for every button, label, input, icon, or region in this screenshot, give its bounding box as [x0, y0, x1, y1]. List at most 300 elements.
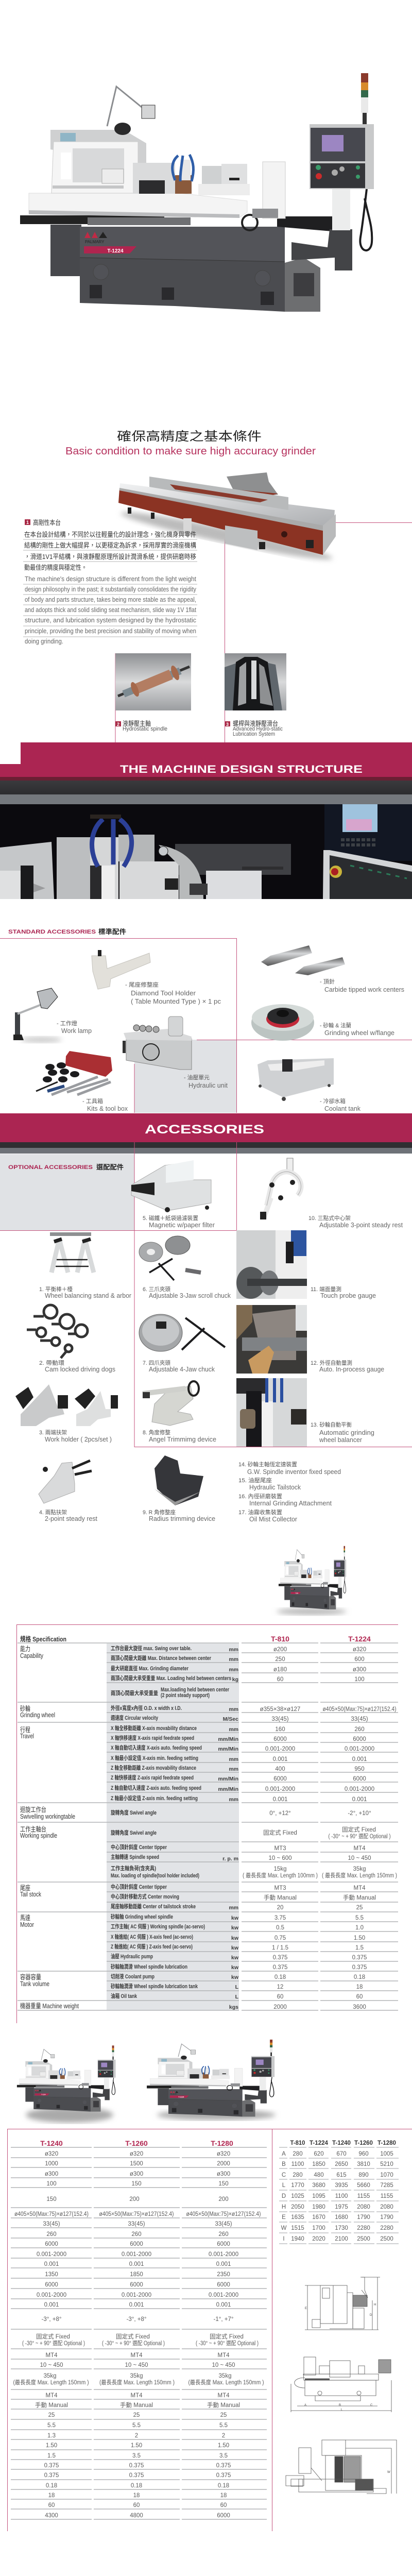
dimension T-1240: 615: [336, 2172, 347, 2178]
table 2 values T-1280: ø405×50(Max:75)×ø127(152.4): [186, 2211, 261, 2217]
text block: rigid base: [23, 519, 197, 645]
table 2 values T-1260: 固定式 Fixed: [116, 2333, 150, 2340]
spec values T-810: 3.75: [274, 1915, 286, 1921]
spec values T-810: 0.001: [273, 1797, 287, 1803]
table 2 values T-1280: ( -30° ~ + 90° 選配 Optional ): [196, 2340, 259, 2347]
table 2 values T-1260: 0.18: [131, 2483, 142, 2489]
icon: grinding wheel with flange: [251, 1004, 314, 1041]
table 2 values T-1260: 18: [133, 2493, 140, 2499]
table 2 values T-1240: 4300: [45, 2513, 58, 2519]
caption: hydrostatic spindle: 2: [117, 722, 119, 727]
control column arm: [291, 229, 352, 270]
table 2 values T-1240: 35kg: [44, 2373, 56, 2379]
spec row rules: [18, 1643, 398, 2010]
spec item labels: Max.loading held between center: [161, 1687, 230, 1693]
table 2 values T-1260: 1500: [130, 2161, 143, 2167]
icon 9: radius trimming device: [154, 1455, 203, 1505]
motor: [118, 835, 154, 861]
table 2 values T-1240: 150: [46, 2196, 57, 2202]
dimension T-1280: [380, 2151, 393, 2242]
label 10: [308, 1215, 403, 1229]
table 2 values T-1280: 固定式 Fixed: [210, 2333, 244, 2340]
table 2 values T-1260: 0.001: [129, 2261, 144, 2267]
table 2 values T-1240: 手動 Manual: [35, 2401, 68, 2409]
spec values T-1224: -2°, +10°: [348, 1810, 371, 1817]
label: work lamp: [57, 1020, 92, 1035]
grinding table top: [29, 188, 247, 217]
spec values T-1224: 6000: [353, 1736, 366, 1742]
spec values T-810: ø200: [273, 1647, 287, 1653]
spec group labels: 機器重量 Machine weight: [20, 2002, 79, 2010]
small machine: T-1280: [147, 2040, 276, 2120]
spec group labels: 能力: [20, 1645, 30, 1653]
table 2 values T-1260: 0.375: [129, 2463, 144, 2469]
spec item labels: Max. loading of spindle(tool holder included): [111, 1873, 199, 1879]
spec item labels: 油箱 Oil tank: [111, 1992, 138, 1999]
spec values T-1224: 0.375: [352, 1964, 367, 1971]
curved guard: [159, 845, 203, 899]
table 2 values T-1280: 6000: [217, 2282, 230, 2288]
spec values T-1224: 260: [354, 1726, 365, 1733]
table 2 values T-1260: 0.001-2000: [122, 2292, 151, 2298]
label 10: 10. 三點式中心架: [308, 1215, 351, 1222]
spec group labels: Swivelling workingtable: [20, 1812, 75, 1820]
table 2 values T-1260: (最長長度 Max. Length 150mm ): [99, 2379, 175, 2386]
dimension T-1224: 620: [314, 2151, 324, 2157]
table 2 values T-1240: ( -30° ~ + 90° 選配 Optional ): [22, 2340, 85, 2347]
section title: 確保高精度之基本條件: [117, 430, 262, 444]
caption: lubrication system: 螺桿與液靜壓滑台: [233, 720, 278, 727]
small machine: T-810: [277, 1546, 347, 1615]
text block: rigid base: and adopts thick and solid sliding seat mechanism, slide way 1V 1flat: [25, 606, 196, 614]
table 2 values T-1260: ( -30° ~ + 90° 選配 Optional ): [102, 2340, 165, 2347]
label: kits and tool box: - 工具箱: [82, 1097, 103, 1105]
table 2 values T-1240: 1.3: [47, 2433, 56, 2439]
list: items 14 to 17: Hydraulic Tailstock: [249, 1484, 301, 1491]
label 9: [143, 1509, 215, 1522]
spec group labels: Grinding wheel: [20, 1711, 55, 1719]
drawing: top view: [286, 2440, 397, 2494]
section title: [65, 430, 316, 457]
table 2 values T-1260: 0.001: [129, 2302, 144, 2308]
spec units: mm: [229, 1766, 238, 1772]
spec units: [218, 1647, 239, 2010]
spec values T-810: 160: [275, 1726, 285, 1733]
list: items 14 to 17: 17. 油霧收集裝置: [238, 1509, 282, 1516]
table 2 values T-1260: 6000: [130, 2282, 143, 2288]
dimension T-810: 2050: [291, 2204, 304, 2210]
label 4: 2-point steady rest: [45, 1515, 98, 1522]
blue hoses: [92, 819, 132, 867]
dimension T-1224: 1850: [312, 2161, 325, 2167]
table 2 values T-1260: 6000: [130, 2241, 143, 2247]
label: work lamp: Work lamp: [61, 1027, 92, 1035]
dimension letters: I: [283, 2236, 285, 2242]
label 8: Angel Trimmimg device: [149, 1436, 216, 1443]
spec group labels: 馬達: [20, 1914, 30, 1922]
spec item labels: 中心頂針斜度 Center tipper: [111, 1883, 167, 1890]
table 2 values T-1240: [13, 2151, 89, 2519]
tailstock: [206, 871, 262, 899]
dimension T-1280: 2080: [380, 2204, 393, 2210]
table 2 values T-1280: 0.001-2000: [209, 2251, 238, 2258]
spec units: kw: [231, 1945, 239, 1951]
label: work lamp: - 工作燈: [57, 1020, 77, 1027]
table 2 values T-1280: 10 ~ 450: [212, 2362, 235, 2368]
spec values T-810: 0.001-2000: [265, 1786, 295, 1792]
label: grinding wheel: - 砂輪 & 法蘭: [320, 1022, 351, 1029]
spec table frame: [16, 1625, 398, 2023]
dimension header: [290, 2140, 396, 2146]
wheel head: [133, 163, 175, 194]
spec values T-810: 6000: [273, 1776, 287, 1782]
spec values T-810: 0.375: [273, 1955, 287, 1961]
spec values T-1224: [322, 1647, 397, 2010]
white wheel body: [119, 861, 179, 899]
spec item labels: 工作台最大旋徑 max. Swing over table.: [111, 1645, 192, 1652]
spec units: kw: [231, 1964, 239, 1971]
dimension letters: W: [281, 2225, 287, 2231]
table 2 values T-1240: 0.18: [46, 2483, 57, 2489]
spec values T-1224: 33(45): [351, 1716, 368, 1722]
spec values T-1224: ø300: [353, 1667, 366, 1673]
machine left rear block: [50, 225, 81, 276]
dimension T-1280: 1005: [380, 2151, 393, 2157]
label 2: Cam locked driving dogs: [45, 1366, 115, 1373]
heading: optional accessories: OPTIONAL ACCESSORIES: [8, 1164, 93, 1171]
table 2 frame: [7, 2129, 412, 2531]
label: diamond tool holder: Diamond Tool Holder: [131, 990, 196, 997]
pink frame lines: [0, 939, 412, 1113]
label 8: 8. 角度修整: [143, 1429, 170, 1436]
spec values T-1224: 手動 Manual: [343, 1894, 376, 1901]
dimension T-1240: [335, 2151, 348, 2242]
dimension T-1224: 3680: [312, 2182, 325, 2189]
label 9: 9. R 角修整座: [143, 1509, 176, 1516]
spec units: mm: [229, 1656, 238, 1663]
dimension table: [279, 2140, 399, 2244]
table 2 values T-1260: 5.5: [132, 2422, 141, 2429]
spec values T-810: 0.5: [276, 1925, 284, 1931]
text block: rigid base: ，滑道1V1平結構，與液靜壓原理所設計潤滑系統，提供研磨時移: [24, 553, 196, 561]
spec values T-810: 60: [277, 1676, 283, 1683]
spec values T-810: 33(45): [271, 1716, 289, 1722]
dimension T-1240: 1730: [335, 2225, 348, 2231]
dimension T-1240: 2100: [335, 2236, 348, 2242]
table 2 values T-1260: -3°, +8°: [127, 2316, 146, 2323]
table 2 values T-1260: [99, 2151, 175, 2519]
text block: rigid base: doing grinding.: [25, 638, 63, 645]
table 2 values T-1260: 1850: [130, 2272, 143, 2278]
dimension T-1260: 2080: [357, 2204, 370, 2210]
label 6: Adjustable 3-Jaw scroll chuck: [149, 1292, 231, 1299]
dimension letters: C: [282, 2172, 286, 2178]
spec values T-810: 6000: [273, 1736, 287, 1742]
spec group labels: Tail stock: [20, 1890, 41, 1898]
label: hydraulic unit: - 油壓單元: [184, 1074, 210, 1081]
icon 7: 4-jaw chuck: [139, 1314, 225, 1351]
label 1: [39, 1285, 131, 1299]
label 9: Radius trimming device: [149, 1515, 215, 1522]
label 7: Adjustable 4-Jaw chuck: [149, 1366, 215, 1373]
table 2 values T-1260: 25: [133, 2412, 140, 2418]
spec values T-1224: 0.001-2000: [345, 1746, 374, 1752]
table 2 values T-1280: 1.50: [218, 2443, 229, 2449]
spec values T-1224: 25: [356, 1905, 363, 1911]
label: carbide work centers: - 頂針: [320, 978, 335, 985]
dimension T-1260: 3810: [357, 2161, 370, 2167]
spec values T-810: ø355×38×ø127: [260, 1706, 300, 1713]
table 2 values T-1260: 2: [135, 2433, 138, 2439]
main machine photo: T-1224: [107, 248, 124, 254]
caption: lubrication system: Advanced Hydro-static: [233, 726, 283, 732]
spec item labels: [111, 1645, 231, 1999]
heading: standard accessories: [8, 928, 126, 936]
drawing: front view: C: [370, 2404, 373, 2407]
spec values T-1224: ø405×50(Max:75)×ø127(152.4): [322, 1706, 397, 1713]
wheel head: [90, 837, 118, 899]
table 2 values T-1280: 25: [220, 2412, 227, 2418]
spec units: kg: [232, 1676, 238, 1683]
table 2 values T-1280: 2000: [217, 2161, 230, 2167]
dimension T-1224: 1980: [312, 2204, 325, 2210]
dimension T-1280: 2500: [380, 2236, 393, 2242]
banner: accessories: [0, 1113, 412, 1154]
label 12: 12. 外徑自動量測: [311, 1359, 352, 1366]
dimension T-1240: 1975: [335, 2204, 348, 2210]
table 2 values T-1240: 18: [48, 2493, 55, 2499]
spec item labels: 旋轉角度 Swivel angle: [111, 1829, 157, 1836]
dimension letters: B: [282, 2161, 286, 2167]
dimension header: T-1260: [354, 2140, 373, 2146]
dimension T-1224: 1670: [312, 2214, 325, 2221]
label 11: [311, 1285, 376, 1299]
blue coolant hoses: [173, 155, 193, 181]
table 2 values T-1260: 手動 Manual: [120, 2401, 153, 2409]
grey panel: optional accessories: [0, 1154, 134, 1230]
drawing: top view: W: [387, 2471, 390, 2474]
drawing: front view: [291, 2357, 391, 2412]
label 13: wheel balancer: [319, 1436, 362, 1444]
table 2 values T-1260: 1.50: [131, 2443, 142, 2449]
spec group labels: 工作主軸台: [20, 1825, 46, 1833]
spec values T-1224: 35kg: [353, 1866, 366, 1872]
coolant pump unit: [285, 258, 320, 312]
main machine photo: PALMARY: [85, 240, 105, 244]
table 2 values T-1280: MT4: [217, 2393, 230, 2399]
table 2 values T-1280: ø300: [217, 2171, 230, 2177]
label: diamond tool holder: - 尾座修整座: [125, 981, 159, 988]
heading: optional accessories: 選配配件: [96, 1163, 124, 1171]
section title: Basic condition to make sure high accuracy grinder: [65, 445, 316, 457]
spec units: r. p. m: [222, 1856, 238, 1862]
spec values T-1224: MT4: [353, 1885, 366, 1891]
main machine photo: [20, 73, 374, 312]
drawing: front view: B: [339, 2404, 341, 2407]
label 3: [39, 1429, 112, 1443]
icon: coolant tank: [258, 1058, 334, 1101]
label 10: Adjustable 3-point steady rest: [319, 1222, 403, 1229]
icon: kits and tool box: [36, 1051, 112, 1095]
table 2 values T-1240: ø405×50(Max:75)×ø127(152.4): [14, 2211, 89, 2217]
table 2 values T-1280: 6000: [217, 2513, 230, 2519]
drawing: side view: D: [370, 2314, 372, 2317]
list: items 14 to 17: 16. 內徑研磨裝置: [238, 1493, 282, 1500]
caption: hydrostatic spindle: Hydrostatic spindle: [123, 726, 167, 732]
dimension T-1260: 2280: [357, 2225, 370, 2231]
spec item labels: 兩頂心間最大承受重量: [111, 1689, 158, 1697]
table 2 values T-1280: 5.5: [219, 2422, 228, 2429]
table 2 values T-1260: 3.5: [132, 2453, 141, 2459]
spec item labels: X 軸最小設定值 X-axis min. feeding setting: [111, 1754, 198, 1761]
dimension T-1280: 1790: [380, 2214, 393, 2221]
spec item labels: 中心頂針移動方式 Center moving: [111, 1893, 179, 1900]
spec item labels: 油壓 Hydraulic pump: [111, 1953, 153, 1960]
dimension letters: A: [282, 2151, 286, 2157]
table 2 values T-1280: -1°, +7°: [214, 2316, 233, 2323]
spec values T-1224: 0.18: [354, 1974, 365, 1980]
photo: lubrication system: [225, 653, 286, 710]
dimension T-810: 1770: [291, 2182, 304, 2189]
table 2 values T-1280: 2: [222, 2433, 225, 2439]
control panel casing: [310, 124, 374, 189]
spec units: kgs: [229, 2004, 238, 2010]
spec values T-810: 20: [277, 1905, 283, 1911]
label 6: 6. 三爪夾頭: [143, 1286, 170, 1293]
label 1: Wheel balancing stand & arbor: [45, 1292, 131, 1299]
icon 3: work holders: [15, 1384, 118, 1426]
dimension letters: E: [282, 2214, 286, 2221]
spec units: mm/Min: [218, 1786, 238, 1792]
spec group labels: 行程: [20, 1726, 30, 1734]
table 2 values T-1280: ø320: [217, 2151, 230, 2157]
table 2 values T-1240: 1.5: [47, 2453, 56, 2459]
label: kits and tool box: [82, 1097, 128, 1112]
table 2 values T-1280: 260: [218, 2231, 229, 2238]
label: kits and tool box: Kits & tool box: [87, 1105, 128, 1112]
spec group labels: Capability: [20, 1652, 43, 1659]
label 2: 2. 帶動環: [39, 1359, 64, 1366]
dimension T-1260: 1155: [357, 2193, 370, 2199]
list: items 14 to 17: G.W. Spindle inventor fixed speed: [247, 1468, 341, 1476]
label: carbide work centers: Carbide tipped work centers: [324, 986, 404, 993]
table 2 values T-1260: 260: [131, 2231, 142, 2238]
dimension T-1224: [312, 2151, 325, 2242]
stack light tower: [361, 73, 368, 83]
table 2 values T-1240: 100: [46, 2181, 57, 2187]
label: hydraulic unit: [184, 1074, 228, 1089]
spec values T-810: 60: [277, 1994, 283, 2000]
spec table header: T-1224: [348, 1635, 371, 1643]
spec values T-810: MT3: [274, 1885, 286, 1891]
label 1: 1. 平衡棒＋檯: [39, 1285, 73, 1293]
icon 4: 2-point steady rest: [39, 1461, 92, 1503]
spec item labels: 中心頂針斜度 Center tipper: [111, 1843, 167, 1851]
table 2 values T-1240: 6000: [45, 2282, 58, 2288]
spec item labels: X 軸自動切入速度 X-axis auto. feeding speed: [111, 1744, 202, 1751]
spec units: mm: [229, 1647, 238, 1653]
spec units: mm: [229, 1797, 238, 1803]
table 2 values T-1240: 33(45): [43, 2221, 60, 2227]
table 2 header: T-1280: [211, 2139, 233, 2147]
spec values T-1224: 600: [354, 1656, 365, 1663]
spec item labels: 最大研磨直徑 Max. Grinding diameter: [111, 1665, 189, 1672]
table 2 values T-1240: (最長長度 Max. Length 150mm ): [13, 2379, 89, 2386]
dimension T-1224: 1095: [312, 2193, 325, 2199]
dimension T-1240: 1680: [335, 2214, 348, 2221]
caption: lubrication system: Lubrication System: [233, 731, 275, 737]
dimension letters: [281, 2151, 287, 2242]
icon: hydraulic unit: [123, 1016, 192, 1070]
spec units: mm: [229, 1756, 238, 1762]
spec values T-810: 2000: [273, 2004, 287, 2010]
table 2 values T-1260: 200: [129, 2196, 140, 2202]
drawing: side view: H: [374, 2303, 376, 2307]
label 12: Auto. In-process gauge: [319, 1366, 384, 1373]
spec group labels: 迴旋工作台: [20, 1806, 46, 1814]
spec values T-1224: 0.375: [352, 1955, 367, 1961]
list: items 14 to 17: Internal Grinding Attachment: [249, 1500, 332, 1507]
spec units: M/Sec: [223, 1716, 238, 1722]
label 4: [39, 1509, 98, 1522]
dimension T-1224: 480: [314, 2172, 324, 2178]
table 2 values T-1280: 35kg: [219, 2373, 231, 2379]
spec item labels: Z 軸全移動距離 Z-axis movability distance: [111, 1764, 196, 1771]
spec item labels: (2 point steady support): [161, 1692, 210, 1699]
dimension T-1260: 890: [358, 2172, 369, 2178]
spec group labels: Tank volume: [20, 1980, 49, 1988]
pink connector lines: [115, 522, 412, 742]
hand wheel: [242, 215, 258, 230]
table 2 values T-1240: 25: [48, 2412, 55, 2418]
dimension T-810: [291, 2151, 304, 2242]
spec grey column: [107, 1643, 239, 2010]
spec item labels: X 軸全移動距離 X-axis movability distance: [111, 1724, 197, 1732]
spec values T-810: 0.001-2000: [265, 1746, 295, 1752]
small machine: T-1240: [17, 2045, 116, 2123]
icon: work lamp: [13, 988, 62, 1043]
dimension T-810: 280: [293, 2151, 303, 2157]
icon 6: 3-jaw scroll chuck: [139, 1236, 201, 1280]
dimension T-1280: 5210: [380, 2161, 393, 2167]
drawing: front view: A: [304, 2404, 306, 2407]
caption: hydrostatic spindle: [115, 720, 167, 732]
label 5: Magnetic w/paper filter: [149, 1222, 215, 1229]
center block: [57, 837, 90, 899]
table 2 values T-1240: ø300: [45, 2171, 58, 2177]
label: grinding wheel: [320, 1022, 394, 1037]
table 2 values T-1260: 33(45): [128, 2221, 145, 2227]
spec values T-1224: 60: [356, 1994, 363, 2000]
photo 12: in-process gauge: [236, 1305, 307, 1374]
machine base casting: [118, 472, 336, 565]
dimension T-1280: 1070: [380, 2172, 393, 2178]
spec item labels: 切削液 Coolant pump: [111, 1973, 154, 1980]
spec values T-1224: 1.0: [355, 1925, 364, 1931]
spec values T-810: ø180: [273, 1667, 287, 1673]
text block: rigid base: 1: [26, 520, 29, 525]
spec values T-1224: MT4: [353, 1845, 366, 1852]
dimension letters: L: [282, 2182, 286, 2189]
spec item labels: 尾座軸移動距離 Center of tailstock stroke: [111, 1903, 196, 1910]
dimension header: T-1280: [377, 2140, 396, 2146]
table 2 values T-1240: 0.001-2000: [37, 2251, 66, 2258]
spec units: mm: [229, 1905, 238, 1911]
table 2 values T-1280: 0.18: [218, 2483, 229, 2489]
spec group labels: Motor: [20, 1921, 35, 1928]
spec values T-1224: 1.50: [354, 1935, 365, 1941]
spec values T-810: MT3: [274, 1845, 286, 1852]
